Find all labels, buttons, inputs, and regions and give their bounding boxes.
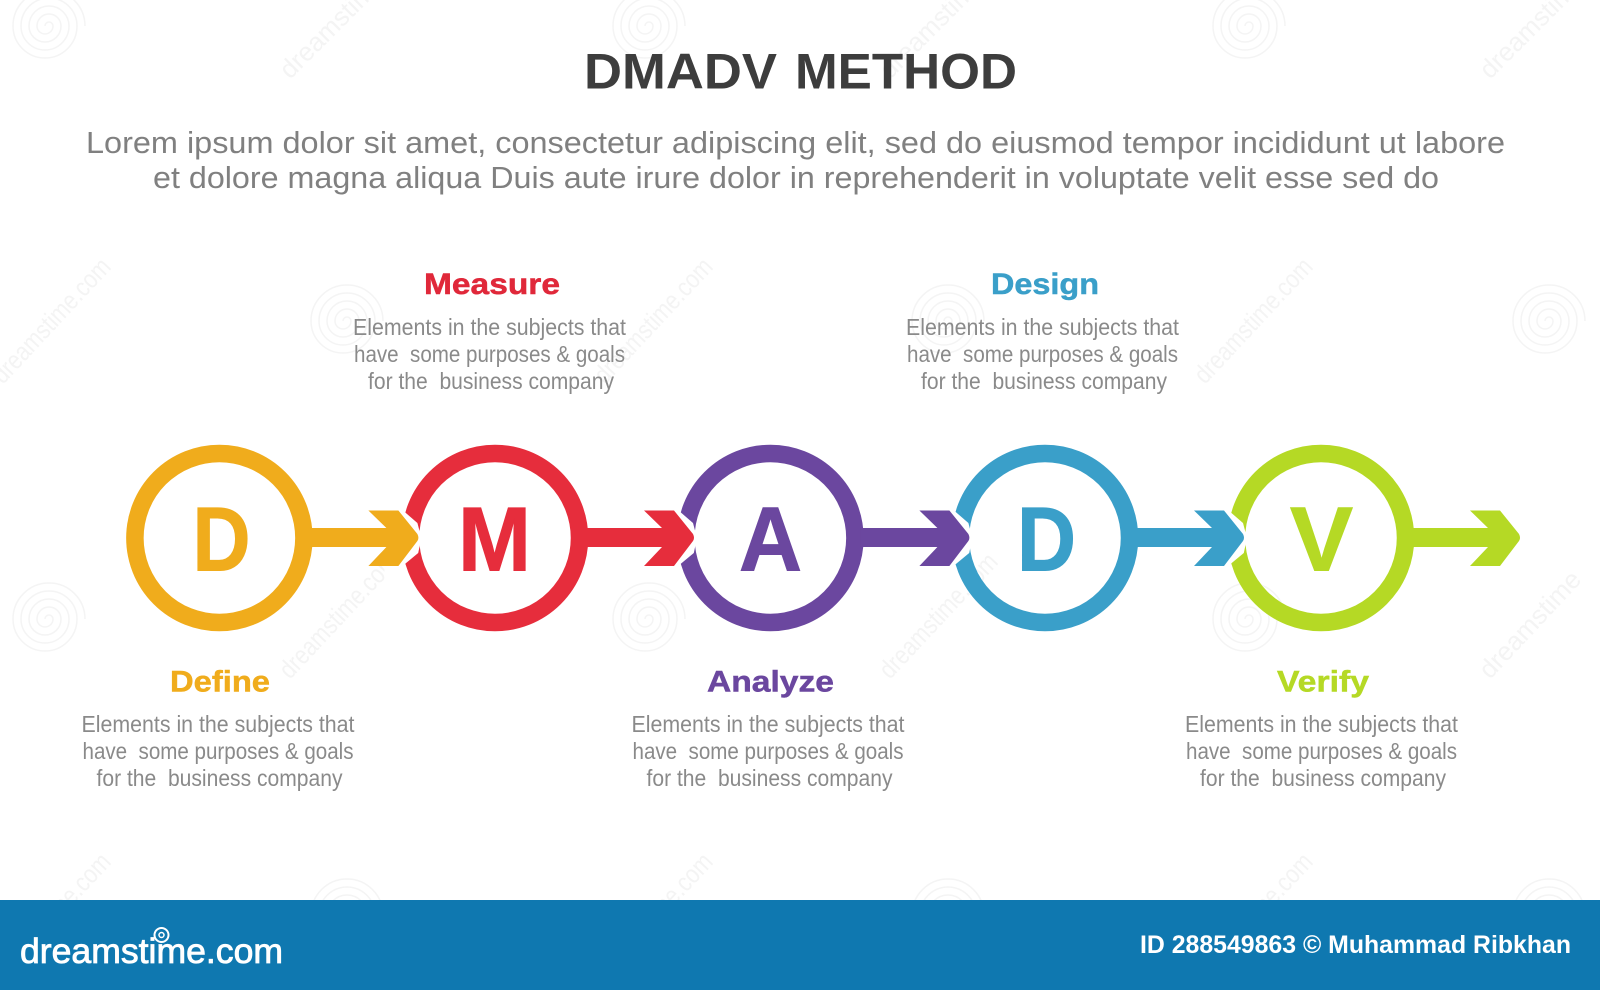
label: Measure: for the business company [368,368,614,394]
label: Analyze: have some purposes & goals [632,738,904,764]
title: METHOD [795,44,1017,100]
watermark pattern: dreamstime.com [872,547,1004,684]
watermark pattern: dreamstime [1472,564,1587,684]
subtitle paragraph: et dolore magna aliqua Duis aute irure dolor in reprehenderit in voluptate velit esse sed do [153,160,1439,195]
arrow: verify outgoing [1411,510,1520,566]
label: Design: Elements in the subjects that [906,314,1180,340]
watermark pattern: dreamstime.com [587,847,719,984]
label: Analyze: Elements in the subjects that [632,711,905,737]
circle: D define [135,454,304,622]
label: Define: for the business company [96,765,343,791]
label: Design [906,268,1180,394]
watermark pattern: dreamstime.com [587,252,719,389]
label: Verify [1185,666,1459,791]
label: Measure [353,268,627,394]
label: Analyze: for the business company [646,765,893,791]
circle: V verify: V [1290,490,1353,590]
label: Define [82,666,355,791]
circle: V verify [1236,454,1406,622]
label: Define: have some purposes & goals [82,738,354,764]
footer logo: dreamstime.com [20,932,283,971]
label: Define: Elements in the subjects that [82,711,355,737]
circle: D design: D [1017,490,1076,590]
label: Measure: Measure [424,268,560,301]
label: Verify: have some purposes & goals [1186,738,1457,764]
arrow: measure to analyze [585,494,697,581]
footer bar [0,900,1600,990]
label: Verify: Elements in the subjects that [1185,711,1459,737]
arrow: define to measure [309,494,421,581]
label: Define: Define [170,666,270,698]
watermark pattern: dreamstime.com [1187,252,1319,389]
label: Verify: for the business company [1200,765,1446,791]
circle: D design [960,454,1130,622]
circle: M measure: M [458,490,531,590]
label: Measure: have some purposes & goals [354,341,625,367]
footer credit: ID 288549863 © Muhammad Ribkhan [1140,931,1571,959]
circle: A analyze [686,454,855,622]
subtitle paragraph: Lorem ipsum dolor sit amet, consectetur adipiscing elit, sed do eiusmod tempor incididunt ut labore [86,125,1505,160]
watermark pattern: dreamstime.com [1187,847,1319,984]
arrow: design to verify [1135,494,1247,581]
label: Design: have some purposes & goals [907,341,1178,367]
subtitle paragraph [86,125,1505,195]
watermark pattern: dreamstime.com [272,547,404,684]
label: Design: Design [991,268,1099,301]
title [584,44,1017,100]
circle: D define: D [192,490,250,590]
label: Analyze [632,666,905,791]
arrow: analyze to design [860,494,972,581]
circle: A analyze: A [739,490,802,590]
label: Analyze: Analyze [707,666,834,698]
circle: M measure [410,454,580,622]
title: DMADV [584,44,778,100]
label: Design: for the business company [921,368,1167,394]
label: Measure: Elements in the subjects that [353,314,627,340]
label: Verify: Verify [1277,666,1369,698]
